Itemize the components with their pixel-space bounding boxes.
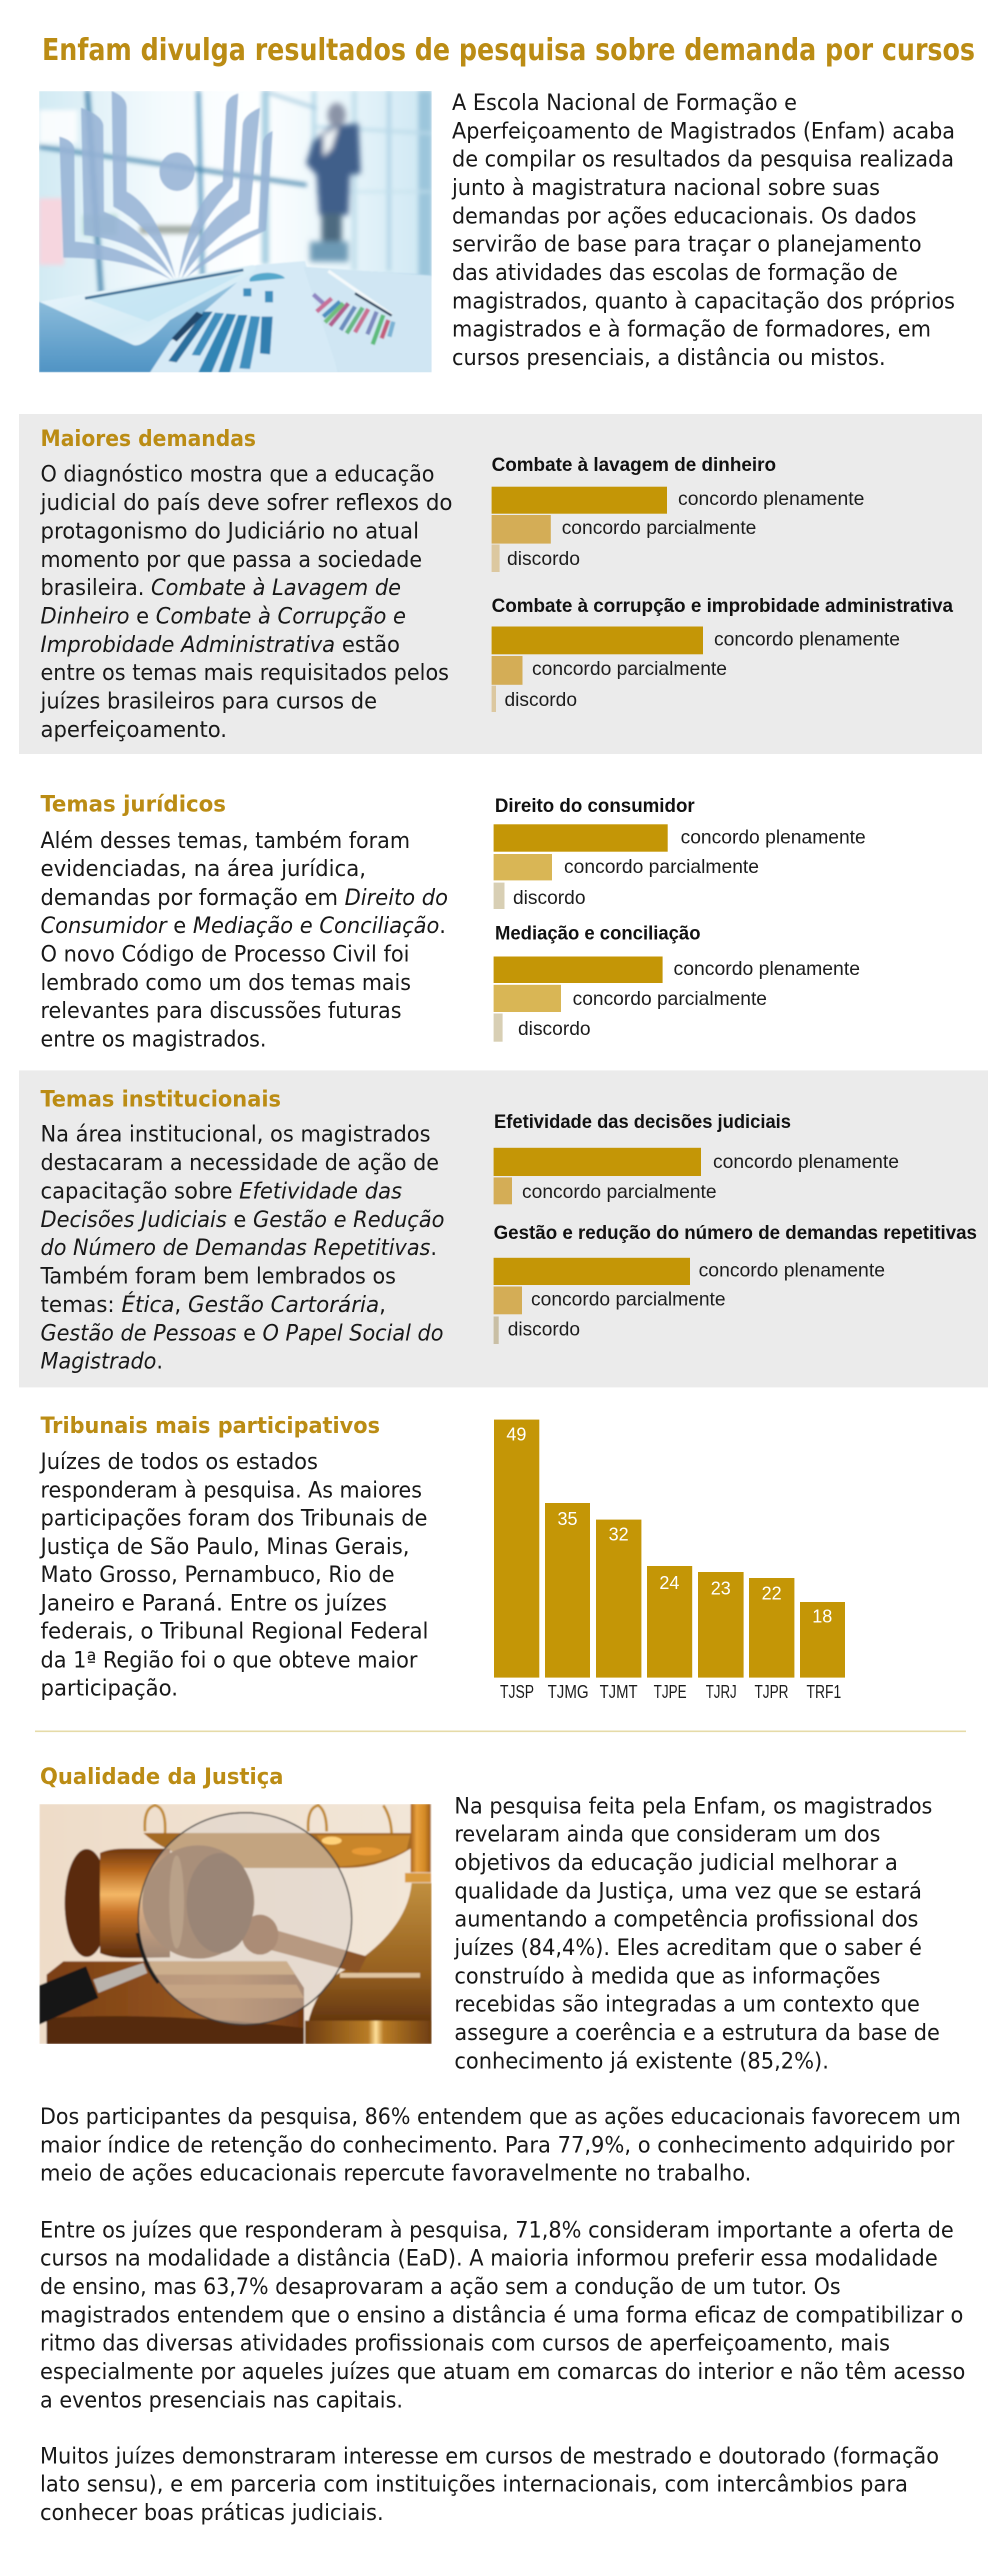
gavel head (64, 1848, 102, 1958)
text: Qualidade da Justiça intro: aumentando a competência profissional dos (454, 1908, 918, 1933)
text: paragraph, ensino a distância: cursos na modalidade a distância (EaD). A maioria informou preferir essa modalidade (40, 2247, 938, 2272)
intro text: magistrados, quanto à capacitação dos próprios (452, 289, 955, 314)
text: Maiores demandas: judicial do país deve sofrer reflexos do (39, 491, 452, 516)
bar chart: Direito do consumidor (494, 795, 866, 909)
text: paragraph, mestrado e doutorado (40, 2444, 939, 2526)
bar chart: Combate à lavagem de dinheiro: discordo (507, 548, 580, 570)
text: Qualidade da Justiça intro (453, 1794, 940, 2074)
text: Tribunais mais participativos: Juízes de todos os estados (38, 1450, 318, 1475)
text: paragraph, mestrado e doutorado: conhecer boas práticas judiciais. (40, 2501, 384, 2526)
bar chart: Mediação e conciliação: concordo plenamente (674, 958, 860, 980)
heading: Qualidade da Justiça: Qualidade da Justiça (40, 1764, 283, 1790)
bar chart: Direito do consumidor: discordo (513, 887, 586, 909)
heading: Temas institucionais: Temas institucionais (40, 1086, 281, 1112)
text: Temas institucionais: Gestão de Pessoas e O Papel Social do (40, 1321, 444, 1346)
coloured paper bars (313, 294, 393, 344)
scale pan (143, 1833, 412, 1868)
lens (138, 1813, 352, 2025)
sound block (47, 1961, 304, 2044)
scale pillar and base (411, 1804, 431, 1872)
bar chart: Efetividade das decisões judiciais (494, 1111, 899, 1204)
text: Temas jurídicos: entre os magistrados. (40, 1028, 266, 1052)
bar chart: Mediação e conciliação: Mediação e conciliação (495, 923, 701, 945)
text: Temas jurídicos (40, 829, 448, 1052)
book logo (59, 91, 273, 280)
bar chart: Combate à lavagem de dinheiro: concordo parcialmente (562, 517, 756, 539)
bar chart: tribunais: 22 (762, 1584, 782, 1604)
text: Tribunais mais participativos: da 1ª Região foi o que obteve maior (40, 1648, 418, 1673)
text: Maiores demandas: juízes brasileiros para cursos de (39, 690, 377, 715)
bar chart: Gestão e redução do número de demandas repetitivas: discordo (508, 1319, 580, 1341)
panel: Temas institucionais (19, 1070, 988, 1387)
text: Tribunais mais participativos: federais, o Tribunal Regional Federal (40, 1620, 428, 1645)
text: paragraph, participantes: Dos participantes da pesquisa, 86% entendem que as ações educacionais favorecem um (40, 2105, 961, 2130)
text: paragraph, participantes: maior índice de retenção do conhecimento. Para 77,9%, o conhecimento adquirido por (40, 2133, 955, 2158)
bar chart: Direito do consumidor: concordo plenamente (681, 826, 866, 848)
text: Temas jurídicos: O novo Código de Processo Civil foi (40, 942, 410, 967)
magnifier handle (39, 1966, 98, 2025)
text: Maiores demandas: aperfeiçoamento. (40, 718, 227, 743)
bar chart: tribunais: 18 (812, 1607, 832, 1627)
bar chart: tribunais: 23 (711, 1578, 731, 1598)
bar chart: tribunais: 24 (659, 1573, 679, 1593)
text: Temas institucionais: Magistrado . (40, 1350, 163, 1375)
bar chart: Gestão e redução do número de demandas repetitivas (494, 1222, 977, 1344)
heading: Maiores demandas: Maiores demandas (40, 426, 256, 452)
heading: Tribunais mais participativos: Tribunais mais participativos (40, 1413, 380, 1439)
text: Temas jurídicos: evidenciadas, na área jurídica, (40, 857, 366, 882)
text: Qualidade da Justiça intro: Na pesquisa feita pela Enfam, os magistrados (454, 1794, 932, 1819)
text: Qualidade da Justiça intro: revelaram ainda que consideram um dos (454, 1823, 880, 1848)
text: Temas institucionais: destacaram a necessidade de ação de (40, 1151, 439, 1176)
bar chart: Combate à corrupção e improbidade administrativa: discordo (504, 689, 577, 711)
text: paragraph, ensino a distância: especialmente por aqueles juízes que atuam em comarcas do interior e não têm acesso (40, 2360, 965, 2385)
bar chart: tribunais: TJPE (654, 1682, 687, 1702)
text: Tribunais mais participativos: responderam à pesquisa. As maiores (40, 1478, 422, 1503)
text: Tribunais mais participativos: Janeiro e Paraná. Entre os juízes (38, 1591, 387, 1616)
text: Maiores demandas: Improbidade Administrativa estão (40, 633, 400, 658)
text: Maiores demandas: protagonismo do Judiciário no atual (40, 519, 419, 544)
intro text: das atividades das escolas de formação de (452, 261, 898, 286)
section: Temas jurídicos (40, 792, 866, 1052)
bar chart: tribunais: 49 (506, 1424, 526, 1444)
text: Temas jurídicos: Consumidor e Mediação e Conciliação . (40, 914, 446, 939)
text: Temas jurídicos: demandas por formação em Direito do (40, 886, 448, 911)
text: Temas institucionais: Decisões Judiciais e Gestão e Redução (40, 1208, 444, 1233)
bar chart: tribunais (494, 1420, 845, 1702)
text: Tribunais mais participativos: Mato Grosso, Pernambuco, Rio de (40, 1563, 394, 1588)
text: Qualidade da Justiça intro: construído à medida que as informações (454, 1964, 880, 1989)
text: Qualidade da Justiça intro: qualidade da Justiça, uma vez que se estará (454, 1879, 922, 1904)
intro text: cursos presenciais, a distância ou mistos. (452, 346, 886, 371)
text: Qualidade da Justiça intro: juízes (84,4%). Eles acreditam que o saber é (453, 1936, 922, 1961)
text: paragraph, participantes (40, 2105, 961, 2187)
text: paragraph, ensino a distância: a eventos presenciais nas capitais. (40, 2388, 403, 2413)
desk and tablet (39, 265, 432, 372)
text: Qualidade da Justiça intro: assegure a coerência e a estrutura da base de (454, 2021, 940, 2046)
intro text: Aperfeiçoamento de Magistrados (Enfam) acaba (452, 119, 955, 144)
text: Qualidade da Justiça intro: recebidas são integradas a um contexto que (454, 1993, 920, 2018)
text: paragraph, ensino a distância: ritmo das diversas atividades profissionais com cursos de aperfeiçoamento, mais (40, 2332, 890, 2357)
bar chart: Combate à corrupção e improbidade administrativa: concordo plenamente (714, 629, 900, 651)
bar chart: tribunais: TJMG (548, 1682, 589, 1702)
image: gavel under magnifying glass (39, 1804, 432, 2044)
intro text: servirão de base para traçar o planejamento (452, 233, 922, 258)
text: paragraph, ensino a distância (40, 2218, 965, 2413)
bar chart: Efetividade das decisões judiciais: concordo parcialmente (522, 1181, 717, 1203)
intro text: demandas por ações educacionais. Os dados (452, 204, 916, 229)
bar chart: Combate à lavagem de dinheiro: Combate à lavagem de dinheiro (492, 454, 776, 476)
bar chart: Efetividade das decisões judiciais: Efetividade das decisões judiciais (494, 1111, 791, 1133)
panel: Maiores demandas (19, 414, 982, 754)
bar chart: Mediação e conciliação: discordo (518, 1018, 591, 1040)
text: Qualidade da Justiça intro: conhecimento já existente (85,2%). (454, 2049, 829, 2074)
text: Maiores demandas (39, 463, 452, 743)
text: paragraph, ensino a distância: Entre os juízes que responderam à pesquisa, 71,8% consideram importante a oferta de (40, 2218, 954, 2243)
text: Temas institucionais: capacitação sobre Efetividade das (40, 1179, 402, 1204)
text: Maiores demandas: Dinheiro e Combate à Corrupção e (40, 604, 406, 630)
text: Temas institucionais: Na área institucional, os magistrados (40, 1123, 430, 1148)
text: Tribunais mais participativos: participação. (40, 1677, 178, 1702)
text: Tribunais mais participativos: Justiça de São Paulo, Minas Gerais, (38, 1535, 409, 1560)
text: Qualidade da Justiça intro: objetivos da educação judicial melhorar a (454, 1851, 898, 1876)
text: Temas jurídicos: Além desses temas, também foram (40, 829, 410, 854)
person (306, 103, 361, 262)
text: Tribunais mais participativos: participações foram dos Tribunais de (40, 1507, 428, 1532)
text: paragraph, ensino a distância: magistrados entendem que o ensino a distância é uma forma eficaz de compatibilizar o (40, 2303, 963, 2328)
intro text: A Escola Nacional de Formação e (452, 91, 797, 116)
text: Temas institucionais (39, 1123, 445, 1375)
bar chart: Direito do consumidor: concordo parcialmente (564, 856, 759, 878)
bar chart: tribunais: 35 (557, 1509, 578, 1529)
intro text: magistrados e à formação de formadores, em (452, 318, 931, 343)
text: Maiores demandas: entre os temas mais requisitados pelos (40, 661, 449, 686)
gavel handle (271, 1930, 366, 1972)
text: Tribunais mais participativos (38, 1450, 429, 1702)
text: Maiores demandas: O diagnóstico mostra que a educação (40, 463, 434, 488)
bar chart: Gestão e redução do número de demandas repetitivas: Gestão e redução do número de demandas repetitivas (494, 1222, 977, 1244)
bar chart: Mediação e conciliação (494, 923, 860, 1042)
text: Maiores demandas: brasileira. Combate à Lavagem de (40, 576, 401, 601)
intro text: de compilar os resultados da pesquisa realizada (452, 148, 954, 173)
blue paper bars (168, 288, 273, 372)
bar chart: tribunais: 32 (609, 1524, 629, 1544)
bar chart: Combate à corrupção e improbidade administrativa: concordo parcialmente (532, 658, 727, 680)
image: business person, book logo and charts (39, 91, 432, 372)
section: Tribunais mais participativos (38, 1413, 845, 1702)
bar chart: Efetividade das decisões judiciais: concordo plenamente (713, 1151, 899, 1173)
text: Temas institucionais: temas: Ética, Gestão Cartorária , (40, 1292, 386, 1318)
text: paragraph, ensino a distância: de ensino, mas 63,7% desaprovaram a ação sem a condução de um tutor. Os (40, 2275, 841, 2300)
text: paragraph, mestrado e doutorado: Muitos juízes demonstraram interesse em cursos de mestrado e doutorado (formação (40, 2444, 939, 2469)
bar chart: Combate à lavagem de dinheiro (492, 454, 864, 572)
bar chart: Direito do consumidor: Direito do consumidor (495, 795, 695, 817)
text: Temas jurídicos: lembrado como um dos temas mais (40, 971, 411, 996)
bar chart: Mediação e conciliação: concordo parcialmente (573, 988, 767, 1010)
text: Temas institucionais: do Número de Demandas Repetitivas . (40, 1236, 437, 1261)
text: Temas jurídicos: relevantes para discussões futuras (40, 999, 402, 1024)
bar chart: Gestão e redução do número de demandas repetitivas: concordo plenamente (699, 1260, 885, 1282)
bar chart: tribunais: TJSP (500, 1682, 534, 1702)
title: Enfam divulga resultados de pesquisa sobre demanda por cursos (42, 33, 975, 68)
bar chart: tribunais: TJPR (754, 1682, 789, 1702)
intro text (451, 91, 955, 371)
bar chart: tribunais: TRF1 (806, 1682, 841, 1702)
text: Maiores demandas: momento por que passa a sociedade (40, 548, 422, 573)
bar chart: Combate à lavagem de dinheiro: concordo plenamente (678, 488, 864, 510)
heading: Temas jurídicos: Temas jurídicos (40, 792, 226, 818)
bar chart: tribunais: TJMT (600, 1682, 638, 1702)
text: Temas institucionais: Também foram bem lembrados os (39, 1264, 396, 1290)
text: paragraph, participantes: meio de ações educacionais repercute favoravelmente no trabalho. (40, 2162, 751, 2187)
bar chart: Combate à corrupção e improbidade administrativa (492, 595, 953, 712)
bar chart: tribunais: TJRJ (706, 1682, 737, 1702)
intro text: junto à magistratura nacional sobre suas (451, 176, 880, 201)
bar chart: Gestão e redução do número de demandas repetitivas: concordo parcialmente (531, 1289, 726, 1311)
text: paragraph, mestrado e doutorado: lato sensu), e em parceria com instituições internacionais, com intercâmbios para (40, 2473, 908, 2498)
bar chart: Combate à corrupção e improbidade administrativa: Combate à corrupção e improbidade administrativa (492, 595, 953, 617)
